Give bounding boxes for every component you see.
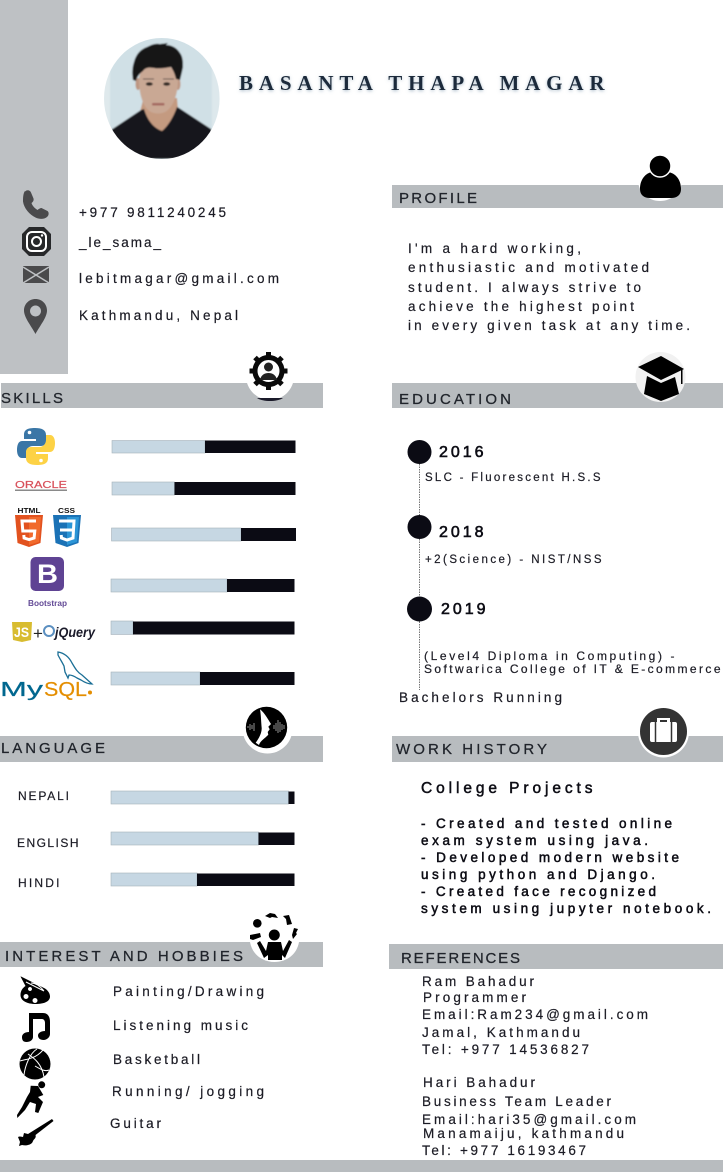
reference: ram bahadur: Tel: +977 14536827: [422, 1042, 589, 1057]
heading bar: education: [392, 383, 723, 408]
skill row: python: [17, 428, 296, 465]
icon: instagram: [22, 227, 51, 256]
bar: bootstrap: [111, 579, 294, 592]
timeline entry: 2018: +2(Science) - NIST/NSS: [425, 554, 602, 566]
bar: mysql: [111, 672, 294, 685]
language row: nepali: NEPALI: [18, 789, 69, 803]
timeline entry: 2019: 2019: [441, 601, 486, 618]
profile text: in every given task at any time.: [408, 318, 690, 333]
work description: [421, 816, 711, 916]
hobby: music: Listening music: [113, 1018, 248, 1033]
timeline entry: 2016: SLC - Fluorescent H.S.S: [425, 472, 601, 484]
hobby: basketball: Basketball: [113, 1052, 200, 1067]
heading: profile: PROFILE: [399, 190, 477, 207]
hobby: music: [22, 1013, 248, 1042]
heading: interests: INTEREST AND HOBBIES: [5, 948, 243, 965]
profile text: student. I always strive to: [408, 280, 641, 295]
logo: mysql: My: [0, 679, 43, 701]
skill row: oracle: [15, 479, 296, 495]
instagram handle: _le_sama_: [78, 235, 161, 250]
icon: mail: [23, 266, 49, 283]
logo: mysql: SQL: [44, 679, 87, 701]
hobby: basketball: [20, 1047, 200, 1080]
work description: - Created and tested online: [421, 816, 672, 831]
bar: html and css: [112, 528, 296, 541]
icon: gear: [246, 352, 294, 401]
reference: hari bahadur: [422, 1075, 636, 1158]
reference: ram bahadur: Programmer: [423, 990, 526, 1005]
icon: person: [638, 155, 682, 201]
language row: english: ENGLISH: [17, 836, 78, 850]
icon: speaking head: [242, 704, 292, 754]
skill row: html and css: [15, 506, 296, 547]
contact block: [22, 190, 279, 334]
photo: [104, 38, 220, 159]
logo: js and jquery: +: [33, 624, 43, 643]
logo: css3: CSS: [58, 506, 75, 515]
reference: hari bahadur: Tel: +977 16193467: [422, 1143, 586, 1158]
logo: bootstrap: B: [37, 559, 58, 589]
heading: language: LANGUAGE: [1, 740, 105, 757]
sidebar: [0, 0, 68, 374]
panel: language: [0, 704, 323, 890]
reference: ram bahadur: [422, 974, 648, 1057]
work subheading: College Projects: [421, 780, 593, 797]
profile text: [408, 241, 690, 333]
reference: ram bahadur: Email:Ram234@gmail.com: [422, 1007, 648, 1022]
timeline entry: 2019: (Level4 Diploma in Computing) -: [424, 649, 674, 663]
hobby: running: Running/ jogging: [112, 1084, 264, 1099]
reference: ram bahadur: Jamal, Kathmandu: [422, 1025, 580, 1040]
work description: - Developed modern website: [421, 850, 679, 865]
work description: system using jupyter notebook.: [421, 901, 711, 916]
skill row: javascript and jquery: [12, 621, 294, 643]
timeline entry: 2019: [407, 596, 721, 676]
icon: graduation cap: [636, 352, 686, 402]
title: BASANTA THAPA MAGAR: [239, 71, 605, 95]
hobby: painting: Painting/Drawing: [113, 984, 264, 999]
reference: ram bahadur: Ram Bahadur: [422, 974, 534, 989]
icon: location pin: [24, 299, 47, 334]
reference: hari bahadur: Business Team Leader: [422, 1094, 612, 1109]
logo: python: [17, 428, 55, 465]
work description: exam system using java.: [421, 833, 648, 848]
timeline line: [418, 464, 420, 690]
icon: phone: [23, 190, 49, 219]
heading bar: references: [389, 944, 723, 969]
hobby: painting: [20, 976, 264, 1004]
timeline entry: 2018: [408, 515, 602, 566]
heading bar: interests: [0, 942, 323, 967]
panel: education: [392, 352, 723, 705]
profile text: I'm a hard working,: [408, 241, 581, 256]
heading: references: REFERENCES: [401, 950, 520, 967]
logo: bootstrap: Bootstrap: [28, 598, 67, 608]
heading: skills: SKILLS: [1, 390, 63, 407]
email: lebitmagar@gmail.com: [79, 271, 279, 286]
hobby: guitar: Guitar: [110, 1116, 162, 1131]
language row: english: [17, 832, 294, 850]
bachelors note: Bachelors Running: [399, 690, 562, 705]
logo: html5: HTML: [18, 506, 41, 515]
heading bar: language: [0, 736, 323, 762]
work description: - Created face recognized: [421, 884, 656, 899]
panel: work history: [392, 706, 723, 916]
icon: briefcase: [638, 706, 689, 758]
heading: work history: WORK HISTORY: [396, 741, 547, 758]
language row: hindi: HINDI: [18, 876, 60, 890]
language row: hindi: [18, 873, 294, 890]
reference: hari bahadur: Hari Bahadur: [423, 1075, 536, 1090]
hobby: running: [17, 1081, 264, 1118]
bar: python: [112, 440, 296, 453]
reference: hari bahadur: Email:hari35@gmail.com: [422, 1112, 636, 1127]
logo: js and jquery: [12, 622, 96, 643]
logo: oracle: ORACLE: [15, 479, 67, 491]
panel: references: [389, 944, 723, 1158]
logo: js and jquery: JS: [14, 624, 29, 640]
logo: js and jquery: jQuery: [53, 624, 96, 640]
panel: profile: [392, 155, 723, 333]
icon: juggling person: [250, 913, 299, 962]
timeline entry: 2016: 2016: [439, 444, 484, 461]
skill row: bootstrap: [28, 557, 294, 608]
bar: oracle: [112, 482, 296, 495]
hobby: guitar: [18, 1116, 162, 1146]
heading bar: skills: [1, 383, 323, 408]
heading: education: EDUCATION: [399, 391, 511, 408]
timeline entry: 2019: Softwarica College of IT & E-commerce: [424, 662, 721, 676]
profile text: enthusiastic and motivated: [408, 260, 649, 275]
language row: nepali: [18, 789, 294, 804]
bar: javascript and jquery: [111, 621, 294, 634]
skill row: mysql: [0, 652, 294, 701]
panel: interest and hobbies: [0, 913, 323, 1146]
footer bar: [0, 1160, 723, 1172]
logo: css3: [53, 506, 81, 547]
timeline entry: 2016: [408, 440, 601, 484]
heading bar: work history: [392, 736, 723, 762]
logo: mysql: [0, 652, 92, 701]
logo: html5: [15, 506, 43, 547]
logo: bootstrap: [28, 557, 67, 608]
panel: skills: [0, 352, 323, 701]
reference: hari bahadur: Manamaiju, kathmandu: [423, 1126, 624, 1141]
work description: using python and Django.: [421, 867, 655, 882]
address: Kathmandu, Nepal: [79, 308, 238, 323]
phone number: +977 9811240245: [79, 205, 226, 220]
timeline entry: 2018: 2018: [439, 524, 484, 541]
heading bar: profile: [392, 185, 723, 208]
profile text: achieve the highest point: [408, 299, 634, 314]
